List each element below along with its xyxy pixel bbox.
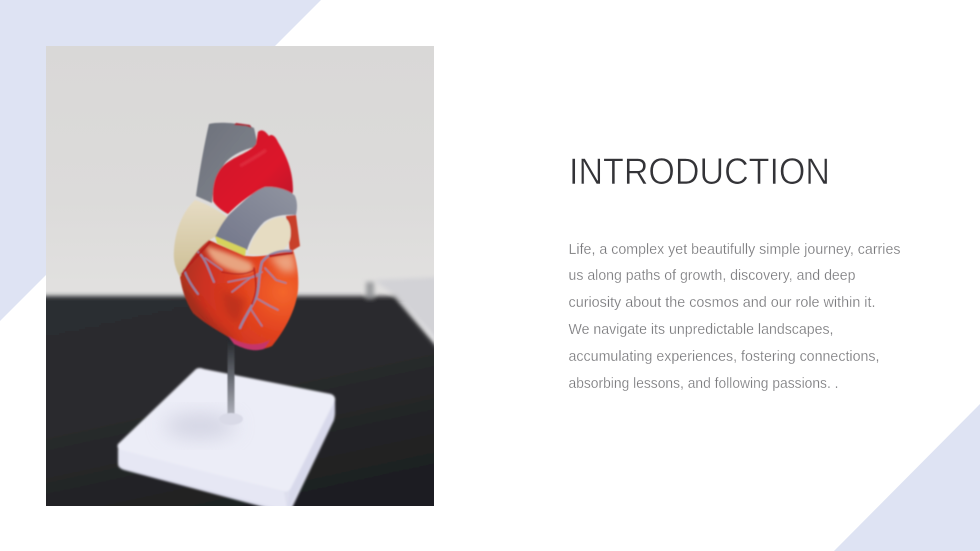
coronary vessels	[184, 251, 291, 328]
decorative triangle: bottom right	[834, 404, 980, 551]
body paragraph: accumulating experiences, fostering connections,	[568, 348, 880, 365]
pink apex	[228, 336, 270, 350]
photo backdrop: wall	[46, 46, 434, 302]
coronary arteries	[182, 242, 292, 304]
atrium highlight	[240, 150, 266, 166]
left cream chamber	[174, 200, 227, 277]
body paragraph: Life, a complex yet beautifully simple journey, carries	[568, 241, 900, 258]
model base	[118, 368, 335, 512]
ventricle shading	[176, 246, 296, 340]
body paragraph: absorbing lessons, and following passions. .	[568, 375, 838, 392]
right cream chamber	[248, 217, 291, 255]
body paragraph: curiosity about the cosmos and our role within it.	[568, 294, 876, 311]
aorta gray vessel	[196, 123, 258, 203]
body paragraph	[568, 241, 900, 392]
body paragraph: We navigate its unpredictable landscapes,	[568, 321, 834, 338]
photo backdrop: table	[46, 278, 434, 506]
red atrium	[213, 130, 293, 214]
ventricle	[180, 240, 298, 349]
yellow band	[215, 236, 246, 256]
title: INTRODUCTION	[569, 151, 830, 192]
model stand pole	[223, 346, 243, 424]
body paragraph: us along paths of growth, discovery, and deep	[568, 267, 856, 284]
right red tissue	[286, 215, 300, 252]
photo: anatomical heart model	[30, 46, 440, 520]
pulmonary gray vessel	[215, 187, 297, 250]
base shadow	[164, 414, 236, 438]
top red vessels	[234, 123, 252, 128]
decorative triangle: top left	[0, 0, 321, 321]
heart model	[174, 123, 300, 350]
